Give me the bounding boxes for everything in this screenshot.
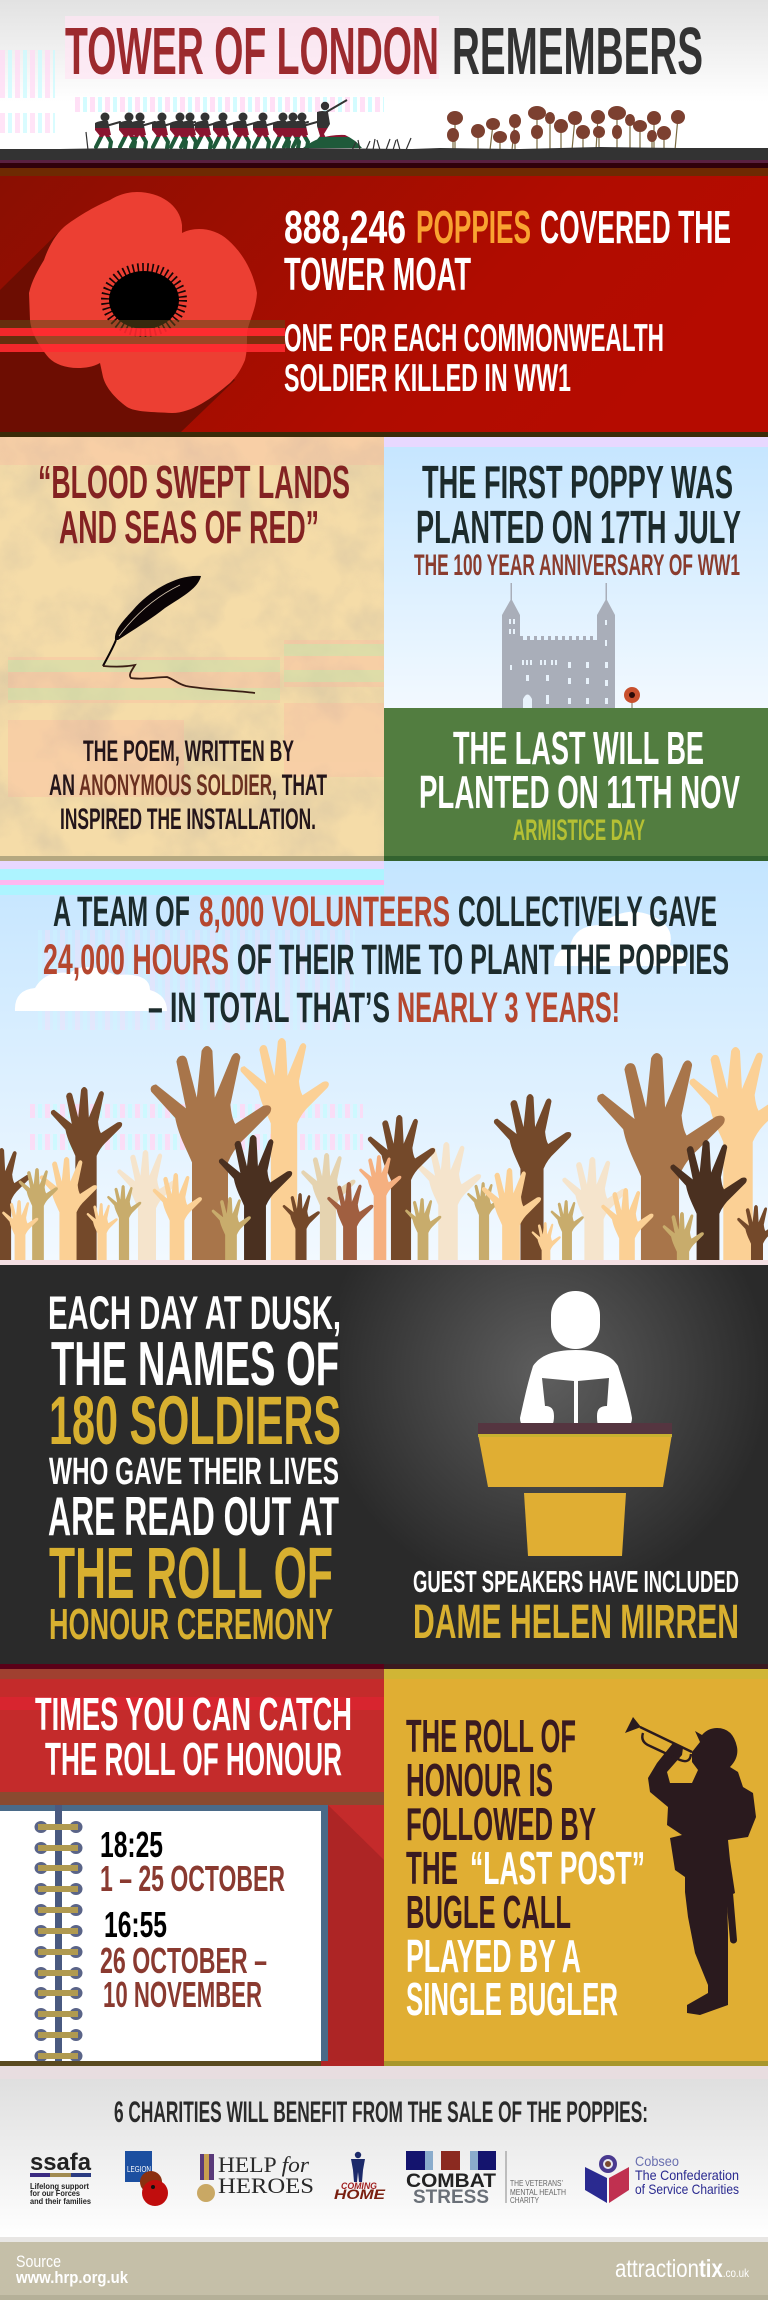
logo: cobseo xyxy=(585,2153,739,2203)
panel: last poppy planted xyxy=(384,708,768,861)
text: last post: “LAST POST” xyxy=(470,1842,645,1894)
text: each day at dusk: 180 SOLDIERS xyxy=(49,1382,341,1459)
text: poem title: “BLOOD SWEPT LANDS xyxy=(38,456,350,508)
icon: small poppy xyxy=(624,687,640,708)
text: ceremony times: 18:25 xyxy=(100,1824,163,1865)
logo: ssafa: Lifelong support xyxy=(30,2181,89,2191)
text: poppies covered the tower moat: TOWER MOAT xyxy=(284,248,471,300)
text: each day at dusk: THE NAMES OF xyxy=(51,1330,339,1399)
text: armistice day: ARMISTICE DAY xyxy=(513,814,645,847)
text: each day at dusk: THE ROLL OF xyxy=(49,1534,333,1614)
text: one for each commonwealth soldier xyxy=(284,317,664,400)
panel: roll of honour ceremony xyxy=(0,1265,768,1664)
logo: ssafa: for our Forces xyxy=(30,2188,80,2198)
text: poem title: AND SEAS OF RED” xyxy=(59,501,319,553)
text: volunteers statement: 24,000 HOURS xyxy=(43,936,229,984)
logo: combat stress xyxy=(406,2151,566,2208)
logo: help for heroes: HEROES xyxy=(218,2173,314,2198)
logo: coming home: HOME xyxy=(334,2186,386,2202)
text: poem caption: THE POEM, WRITTEN BY xyxy=(83,735,294,768)
text: poppies covered the tower moat: 888,246 xyxy=(284,201,406,253)
header background xyxy=(0,0,768,170)
text: each day at dusk: ARE READ OUT AT xyxy=(48,1485,339,1547)
logo: combat stress: CHARITY xyxy=(510,2195,539,2205)
text: one for each commonwealth soldier: SOLDIER KILLED IN WW1 xyxy=(284,357,571,400)
logo: combat stress: STRESS xyxy=(413,2187,489,2208)
logo: coming home: COMING xyxy=(341,2181,377,2191)
text: ceremony times: 16:55 xyxy=(104,1904,167,1945)
title: TOWER OF LONDON xyxy=(65,14,439,89)
text: times heading: TIMES YOU CAN CATCH xyxy=(35,1688,352,1740)
logo: royal british legion xyxy=(125,2151,168,2206)
panel: charities xyxy=(0,2066,768,2237)
text: source: www.hrp.org.uk xyxy=(15,2268,128,2287)
panel: first poppy planted xyxy=(384,437,768,708)
text: last poppy date xyxy=(419,722,740,818)
logo: ssafa: ssafa xyxy=(30,2149,92,2176)
logo: attractiontix: attractiontix.co.uk xyxy=(615,2255,750,2283)
text: last post xyxy=(406,1710,645,2025)
logo: coming home xyxy=(334,2152,386,2202)
illustration: raised hands xyxy=(0,1038,768,1260)
text: ceremony times: 1 – 25 OCTOBER xyxy=(100,1858,285,1899)
logo: cobseo: The Confederation xyxy=(635,2167,739,2183)
text: last post: THE xyxy=(406,1842,458,1894)
text: poem caption: INSPIRED THE INSTALLATION. xyxy=(60,803,316,836)
poppy long shadow xyxy=(0,227,235,432)
text: source: Source xyxy=(16,2252,61,2271)
panel: footer xyxy=(0,2237,768,2300)
logo: ssafa xyxy=(30,2149,92,2206)
text: times heading xyxy=(35,1688,352,1785)
illustration: poppy field xyxy=(447,106,685,150)
text: each day at dusk: WHO GAVE THEIR LIVES xyxy=(49,1451,339,1493)
text: guest speakers xyxy=(413,1565,739,1649)
logo: royal british legion: LEGION xyxy=(127,2165,151,2174)
text: volunteers statement: A TEAM OF xyxy=(53,888,190,936)
panel: volunteers xyxy=(0,861,768,1265)
logo: cobseo: Cobseo xyxy=(635,2153,679,2169)
logo: combat stress: MENTAL HEALTH xyxy=(510,2187,566,2197)
logo: help for heroes xyxy=(197,2152,314,2202)
illustration: tower of london xyxy=(502,583,615,708)
icon: speaker at lectern xyxy=(478,1291,672,1556)
illustration: soldiers silhouette xyxy=(86,100,411,150)
text: last post: THE ROLL OF xyxy=(406,1710,576,1762)
icon: large poppy xyxy=(29,192,257,413)
text: last post: PLAYED BY A xyxy=(406,1930,581,1982)
text: each day at dusk: EACH DAY AT DUSK, xyxy=(48,1286,341,1339)
text: poem caption: ANONYMOUS SOLDIER xyxy=(79,769,272,802)
text: first poppy date xyxy=(416,456,741,553)
icon: bugler silhouette xyxy=(625,1717,756,2015)
panel: blood swept lands poem xyxy=(0,437,384,861)
logo: combat stress: COMBAT xyxy=(406,2171,496,2192)
text: volunteers statement: – IN TOTAL THAT’S xyxy=(148,984,390,1032)
text: last post: HONOUR IS xyxy=(406,1754,553,1806)
text: last post: BUGLE CALL xyxy=(406,1886,571,1938)
text: ceremony times: 10 NOVEMBER xyxy=(103,1974,262,2015)
icon: feather quill xyxy=(103,576,255,693)
logo: cobseo: of Service Charities xyxy=(635,2181,739,2197)
text: poem title xyxy=(38,456,350,553)
text: volunteers statement xyxy=(43,888,729,1032)
text: poppies covered the tower moat xyxy=(284,201,731,300)
text: each day at dusk: HONOUR CEREMONY xyxy=(49,1600,333,1649)
text: last post: FOLLOWED BY xyxy=(406,1798,596,1850)
text: times heading: THE ROLL OF HONOUR xyxy=(45,1733,342,1785)
logo: help for heroes: HELP for xyxy=(218,2152,309,2177)
illustration: clouds xyxy=(15,912,686,1011)
logo: combat stress: THE VETERANS’ xyxy=(510,2178,563,2188)
logo: ssafa: and their families xyxy=(30,2196,91,2206)
text: source xyxy=(15,2252,128,2287)
panel: last post bugle call xyxy=(384,1669,768,2062)
text: ceremony times: 26 OCTOBER – xyxy=(100,1940,267,1981)
text: poem caption: AN xyxy=(49,769,75,802)
panel: 888,246 poppies xyxy=(0,176,768,437)
text: ceremony times xyxy=(100,1824,285,2015)
panel: times of the roll of honour xyxy=(0,1669,384,2062)
text: volunteers statement: NEARLY 3 YEARS! xyxy=(397,984,620,1032)
icon: spiral notebook xyxy=(0,1805,328,2062)
text: poppies covered the tower moat: POPPIES xyxy=(416,201,531,253)
text: poem caption xyxy=(49,735,327,836)
text: poem caption: , THAT xyxy=(272,769,327,802)
ground strip xyxy=(0,147,768,163)
text: each day at dusk xyxy=(48,1286,341,1649)
text: volunteers statement: 8,000 VOLUNTEERS xyxy=(199,888,450,936)
